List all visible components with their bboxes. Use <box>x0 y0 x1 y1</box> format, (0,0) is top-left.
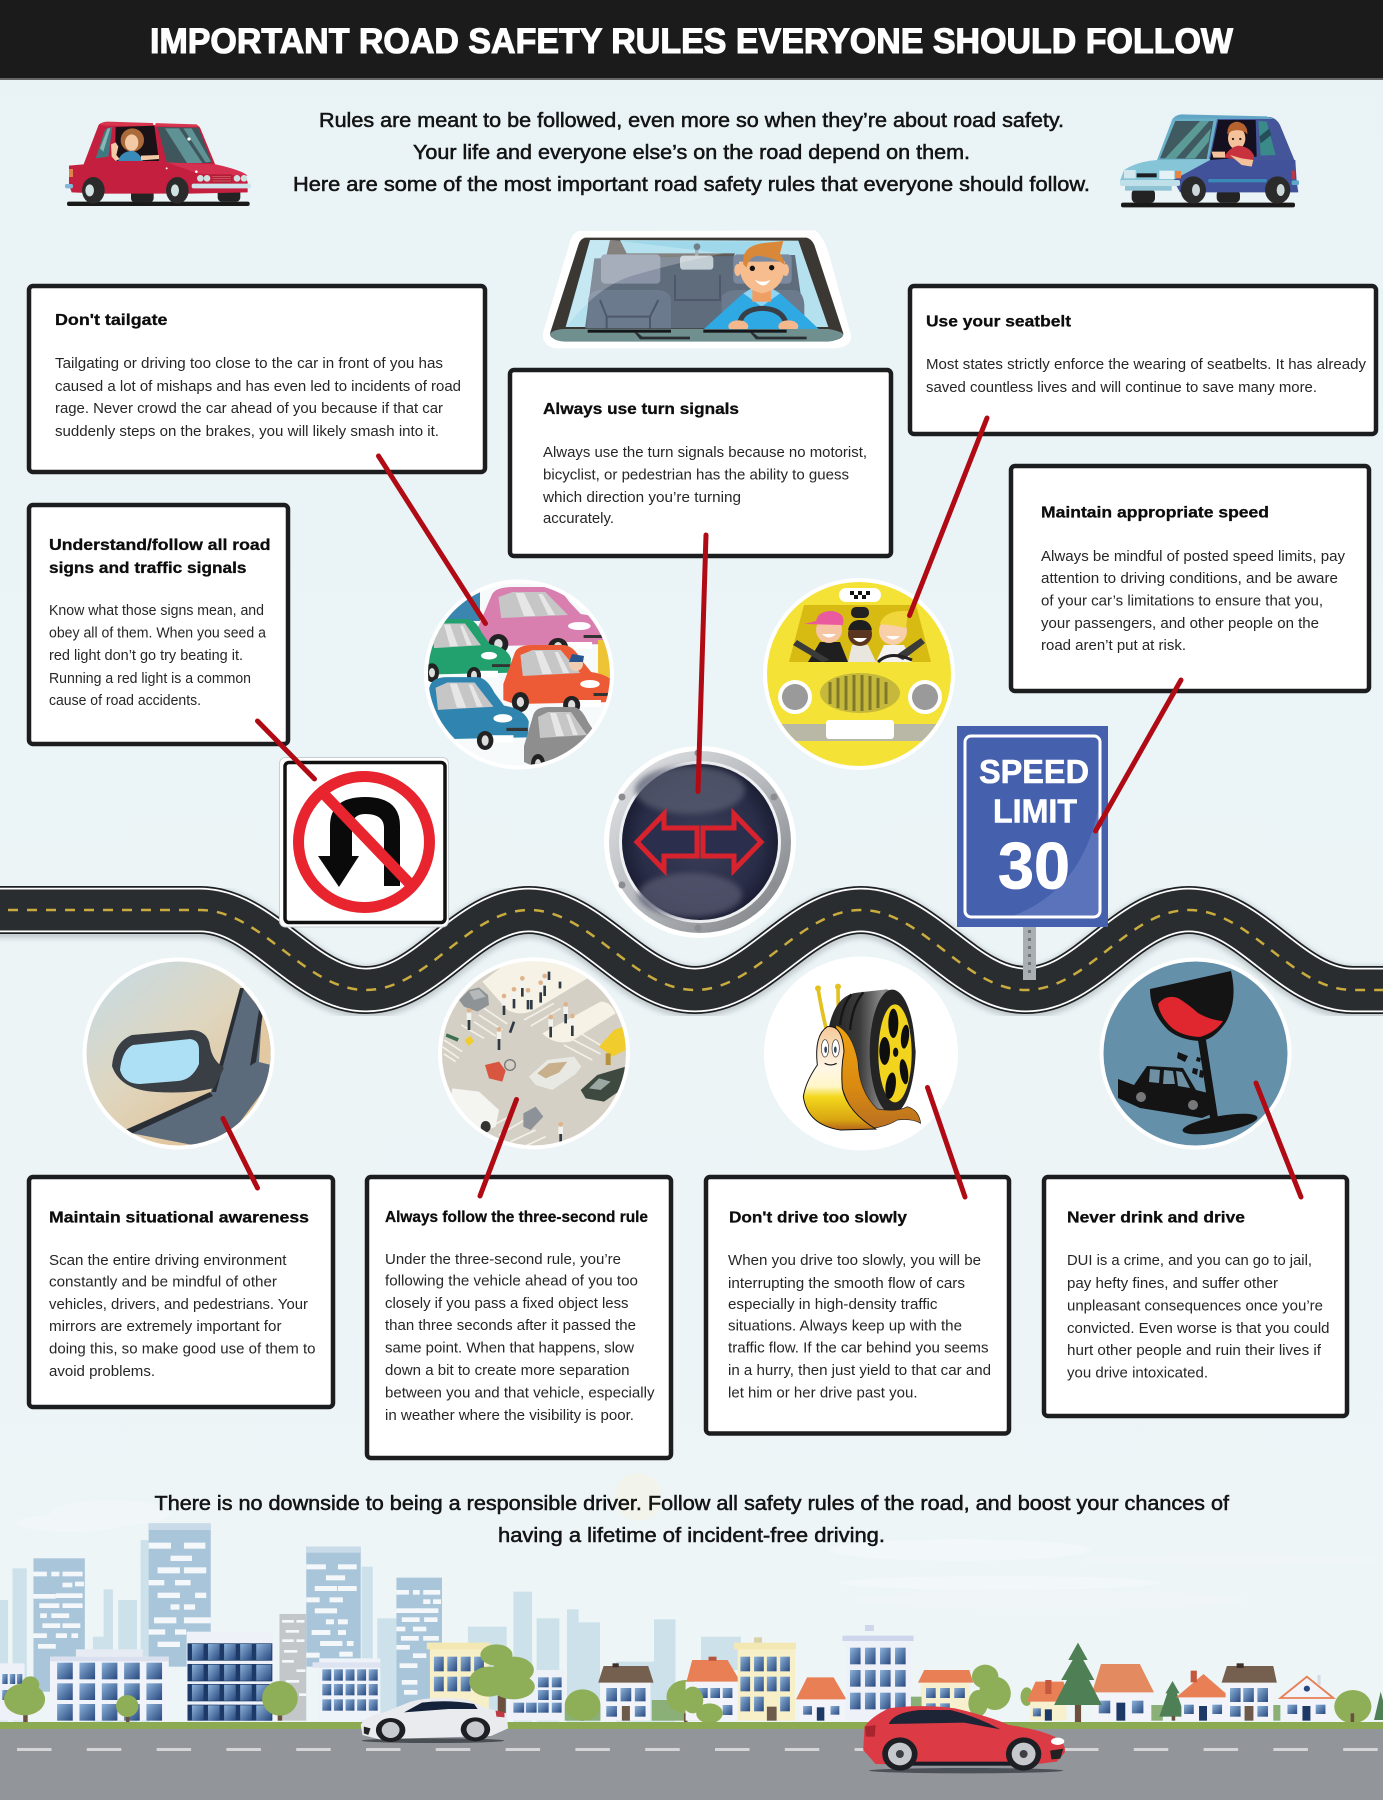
body text: vehicles, drivers, and pedestrians. Your <box>49 1297 308 1313</box>
body text: Under the three-second rule, you’re <box>385 1252 621 1268</box>
body text: attention to driving conditions, and be aware <box>1041 571 1338 587</box>
body text: Running a red light is a common <box>49 671 251 687</box>
title: IMPORTANT ROAD SAFETY RULES EVERYONE SHOULD FOLLOW <box>150 22 1233 61</box>
body text: caused a lot of mishaps and has even led to incidents of road <box>55 379 461 395</box>
connector lines <box>223 418 1301 1197</box>
skyline: right houses and trees <box>682 1625 1383 1725</box>
body text: traffic flow. If the car behind you seems <box>728 1340 988 1356</box>
body text: Most states strictly enforce the wearing of seatbelts. It has already <box>926 357 1367 373</box>
icon: turn signal indicator <box>604 746 796 938</box>
heading: Always follow the three-second rule <box>385 1209 648 1226</box>
heading: Use your seatbelt <box>926 314 1072 330</box>
panel: maintain appropriate speed <box>1011 466 1369 691</box>
body text: hurt other people and ruin their lives if <box>1067 1343 1322 1359</box>
body text: down a bit to create more separation <box>385 1363 630 1379</box>
heading: Understand/follow all road <box>49 537 270 554</box>
heading: Don't drive too slowly <box>729 1210 907 1226</box>
clouds and sun in skyline sky <box>15 1473 1380 1609</box>
body text <box>1041 549 1346 654</box>
panel: never drink and drive <box>1044 1177 1347 1416</box>
body text: Always use the turn signals because no motorist, <box>543 445 867 461</box>
body text: than three seconds after it passed the <box>385 1318 636 1334</box>
icon: no U-turn sign <box>280 758 448 927</box>
body text <box>385 1252 655 1424</box>
body text: closely if you pass a fixed object less <box>385 1296 628 1312</box>
body text: rage. Never crowd the car ahead of you because if that car <box>55 401 443 417</box>
intro text <box>293 109 1090 196</box>
closing statement: having a lifetime of incident-free driving. <box>498 1524 885 1547</box>
body text: DUI is a crime, and you can go to jail, <box>1067 1253 1312 1269</box>
heading: Maintain situational awareness <box>49 1210 309 1226</box>
body text: unpleasant consequences once you’re <box>1067 1298 1323 1314</box>
body text: same point. When that happens, slow <box>385 1340 635 1356</box>
heading <box>49 537 270 577</box>
body text: Always be mindful of posted speed limits, pay <box>1041 549 1346 565</box>
heading: Always use turn signals <box>543 401 739 418</box>
body text: you drive intoxicated. <box>1067 1366 1208 1382</box>
closing statement: There is no downside to being a responsible driver. Follow all safety rules of the road, and boost your chances of <box>154 1492 1229 1515</box>
panel: three-second rule <box>367 1177 671 1458</box>
body text: Tailgating or driving too close to the car in front of you has <box>55 356 443 372</box>
body text: your passengers, and other people on the <box>1041 616 1319 632</box>
body text: in a hurry, then just yield to that car and <box>728 1363 991 1379</box>
body text: pay hefty fines, and suffer other <box>1067 1276 1278 1292</box>
body text: When you drive too slowly, you will be <box>728 1253 981 1269</box>
body text: Know what those signs mean, and <box>49 603 264 619</box>
body text <box>926 357 1367 396</box>
icon: taxi with passengers circle <box>763 578 955 770</box>
body text: convicted. Even worse is that you could <box>1067 1321 1330 1337</box>
body text: doing this, so make good use of them to <box>49 1342 316 1358</box>
body text: bicyclist, or pedestrian has the ability to guess <box>543 468 849 484</box>
icon: speed limit sign: 30 <box>998 828 1070 902</box>
icon: white car on street <box>361 1698 508 1743</box>
heading: Don't tailgate <box>55 312 168 329</box>
icon: red car on street <box>863 1706 1065 1773</box>
icon: traffic jam circle <box>418 580 617 776</box>
body text: obey all of them. When you seed a <box>49 626 267 642</box>
closing statement <box>154 1492 1229 1547</box>
panel: don't tailgate <box>29 286 485 472</box>
body text: in weather where the visibility is poor. <box>385 1408 634 1424</box>
body text: situations. Always keep up with the <box>728 1318 962 1334</box>
heading: Maintain appropriate speed <box>1041 504 1269 522</box>
intro text: Here are some of the most important road safety rules that everyone should follow. <box>293 173 1090 196</box>
panel: use your seatbelt <box>910 286 1376 434</box>
icon: wine glass and crashed car circle <box>1100 958 1292 1150</box>
body text: saved countless lives and will continue to save many more. <box>926 380 1317 396</box>
body text: of your car’s limitations to ensure that you, <box>1041 594 1323 610</box>
icon: speed limit sign: LIMIT <box>993 792 1077 830</box>
body text: avoid problems. <box>49 1364 155 1380</box>
body text: cause of road accidents. <box>49 693 201 709</box>
panel: understand signs and signals <box>29 505 288 744</box>
body text <box>1067 1253 1330 1382</box>
icon: speed limit sign <box>957 726 1108 980</box>
header bar <box>0 0 1383 80</box>
winding road <box>0 910 1383 992</box>
body text <box>49 1253 316 1380</box>
panel: always use turn signals <box>510 370 891 556</box>
panel: maintain situational awareness <box>29 1177 333 1407</box>
body text: especially in high-density traffic <box>728 1297 938 1313</box>
icon: driver behind windshield <box>543 230 851 348</box>
body text: interrupting the smooth flow of cars <box>728 1276 965 1292</box>
grass and city street <box>0 1722 1383 1800</box>
panel: don't drive too slowly <box>706 1177 1009 1434</box>
body text <box>55 356 461 440</box>
icon: speed limit sign: SPEED <box>979 753 1089 790</box>
heading: Never drink and drive <box>1067 1210 1245 1226</box>
body text: accurately. <box>543 511 614 527</box>
heading: signs and traffic signals <box>49 560 247 577</box>
body text: following the vehicle ahead of you too <box>385 1274 638 1290</box>
icon: snail tire circle <box>764 956 958 1150</box>
body text <box>728 1253 991 1402</box>
icon: busy intersection circle <box>437 957 631 1150</box>
body text: suddenly steps on the brakes, you will likely smash into it. <box>55 424 439 440</box>
intro text: Rules are meant to be followed, even more so when they’re about road safety. <box>319 109 1064 132</box>
body text <box>49 603 267 709</box>
body text: let him or her drive past you. <box>728 1386 918 1402</box>
body text: constantly and be mindful of other <box>49 1274 277 1290</box>
body text: road aren’t put at risk. <box>1041 638 1186 654</box>
body text: which direction you’re turning <box>542 490 741 506</box>
body text: Scan the entire driving environment <box>49 1253 286 1269</box>
body text: between you and that vehicle, especially <box>385 1386 655 1402</box>
icon: side mirror circle <box>82 958 275 1150</box>
body text <box>542 445 867 527</box>
body text: red light don’t go try beating it. <box>49 648 243 664</box>
intro text: Your life and everyone else’s on the road depend on them. <box>413 141 970 164</box>
icon: red car with woman driver <box>65 122 251 206</box>
icon: blue car with male driver <box>1120 114 1299 207</box>
body text: mirrors are extremely important for <box>49 1319 282 1335</box>
skyline: left city buildings <box>0 1523 704 1727</box>
